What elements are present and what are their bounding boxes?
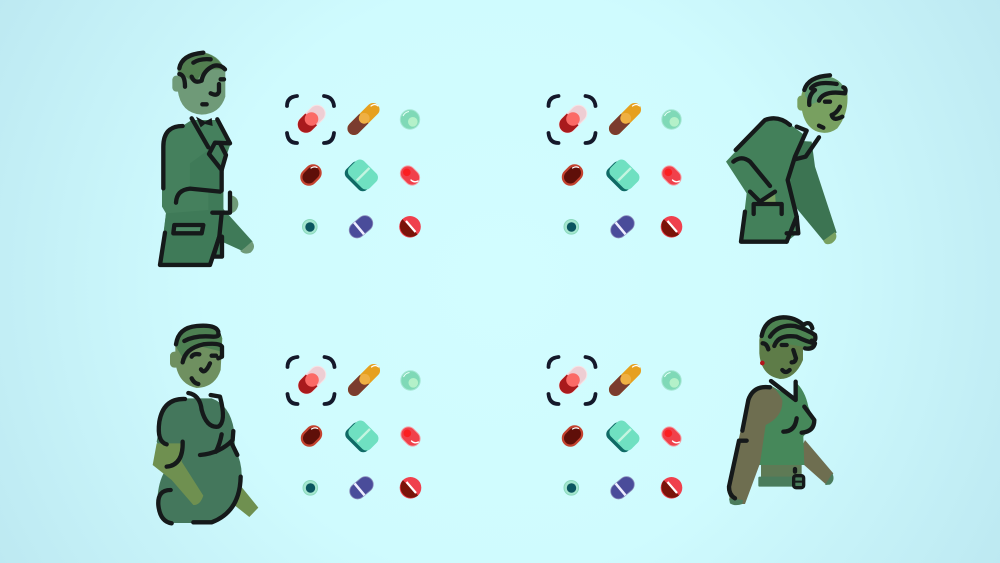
figure: man in suit [159,52,254,265]
figure: pregnant woman [153,325,258,523]
figure: woman with curly hair [727,317,834,505]
figure: man bending [726,75,848,244]
pill grid: top left [287,96,423,241]
pill grid: bottom right [548,357,684,502]
pill grid: top right [548,96,684,241]
pill grid: bottom left [288,357,423,502]
